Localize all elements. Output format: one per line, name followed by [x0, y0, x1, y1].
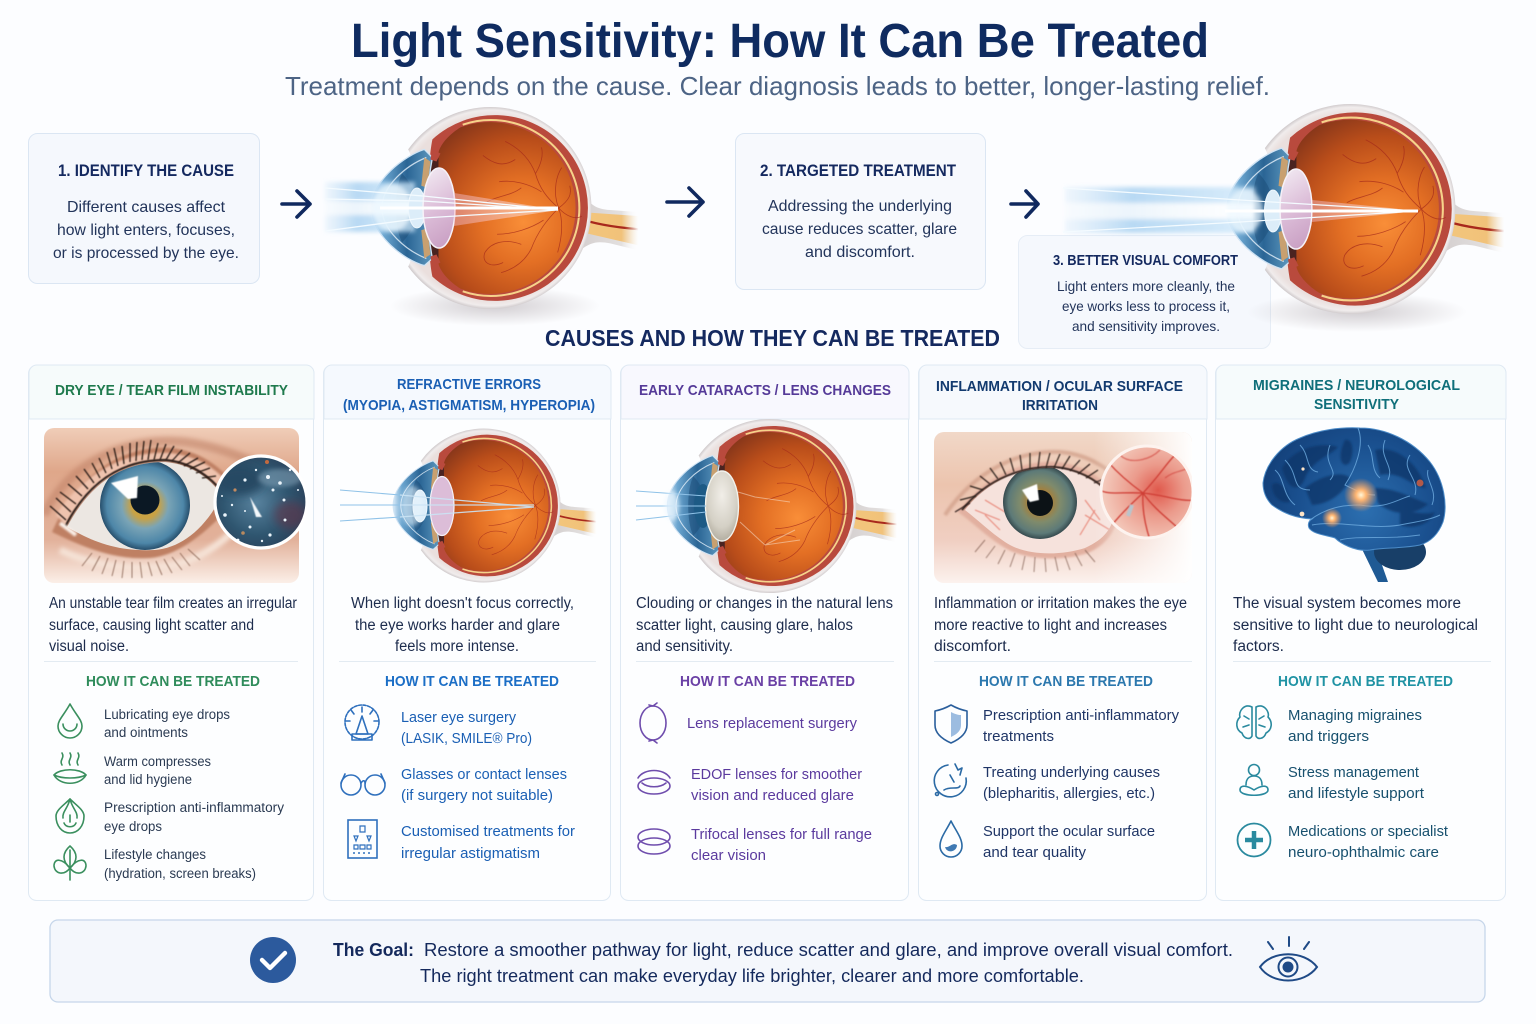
treatments heading: inflammation: HOW IT CAN BE TREATED: [979, 673, 1153, 690]
illustration: brain: [1263, 428, 1445, 582]
description: dry eye: [49, 595, 297, 655]
treatment: lens replacement: Lens replacement surgery: [687, 715, 857, 732]
treatment: underlying causes: Treating underlying causes: [983, 764, 1160, 781]
footer goal banner: [50, 920, 1485, 1002]
panel: inflammation: [918, 365, 1207, 900]
icon: underlying causes: [934, 764, 966, 797]
treatments heading: refractive errors: HOW IT CAN BE TREATED: [385, 673, 559, 690]
icon: meditation: [1240, 764, 1268, 795]
step 1 box: how light enters, focuses,: [57, 222, 235, 239]
treatment: glasses: [401, 766, 567, 804]
treatment: prescription: treatments: [983, 728, 1054, 745]
section heading: CAUSES AND HOW THEY CAN BE TREATED: [545, 325, 1000, 351]
treatment: underlying causes: [983, 764, 1160, 802]
treatment: prescription: [983, 707, 1179, 745]
treatment: warm compress: Warm compresses: [104, 754, 211, 769]
panel: early cataracts: [620, 365, 909, 900]
icon: trifocal lens: [638, 829, 670, 854]
step 1 box: [28, 134, 260, 284]
treatment: laser surgery: (LASIK, SMILE® Pro): [401, 730, 532, 747]
treatment: ocular surface: Support the ocular surface: [983, 823, 1155, 840]
description: dry eye: visual noise.: [49, 638, 129, 655]
heading: migraines: [1253, 377, 1460, 413]
treatment: eye drops: and ointments: [104, 725, 188, 740]
description: inflammation: [934, 595, 1187, 655]
goal text: Restore a smoother pathway for light, reduce scatter and glare, and improve overall visual comfort.: [424, 939, 1233, 960]
description: migraines: [1233, 595, 1478, 655]
description: refractive errors: [351, 595, 574, 655]
description: inflammation: Inflammation or irritation makes the eye: [934, 595, 1187, 612]
eye diagram: cataract: [636, 419, 897, 593]
icon: tear drop: [940, 821, 962, 857]
step 3 text: eye works less to process it,: [1062, 298, 1230, 314]
treatment: stress: and lifestyle support: [1288, 785, 1425, 802]
step 1 box: 1. IDENTIFY THE CAUSE: [58, 162, 234, 180]
treatment: customised: Customised treatments for: [401, 823, 575, 840]
heading: dry eye: DRY EYE / TEAR FILM INSTABILITY: [55, 382, 288, 399]
icon: laser: [345, 705, 379, 740]
treatment: anti-inflammatory drops: eye drops: [104, 819, 162, 834]
treatment: prescription: Prescription anti-inflammatory: [983, 707, 1179, 724]
goal text: The Goal:: [333, 939, 414, 960]
treatments heading: dry eye: HOW IT CAN BE TREATED: [86, 673, 260, 690]
description: early cataracts: scatter light, causing glare, halos: [636, 617, 853, 634]
icon: leaf: [54, 846, 86, 880]
treatment: eye drops: [104, 707, 230, 740]
icon: warm compress: [54, 753, 86, 783]
icon: eye chart: [348, 820, 377, 858]
panel: dry eye: [28, 365, 314, 900]
description: refractive errors: the eye works harder and glare: [355, 617, 560, 634]
heading: inflammation: INFLAMMATION / OCULAR SURFACE: [936, 378, 1183, 395]
treatment: migraines: Managing migraines: [1288, 707, 1422, 724]
treatments heading: early cataracts: HOW IT CAN BE TREATED: [680, 673, 855, 690]
arrow: eye to step 2: [667, 188, 703, 216]
step 3 text: and sensitivity improves.: [1072, 318, 1220, 334]
description: early cataracts: and sensitivity.: [636, 638, 733, 655]
treatment: anti-inflammatory drops: [104, 800, 284, 834]
step 3 box background: [1018, 236, 1270, 348]
goal text: [333, 939, 1233, 986]
eye diagram: scattered light: [325, 107, 638, 326]
photo: dry eye with tear film close-up: [44, 428, 307, 583]
treatment: trifocal: clear vision: [691, 847, 766, 864]
eye diagram: clean light: [1063, 104, 1504, 332]
description: inflammation: discomfort.: [934, 638, 1011, 655]
treatment: glasses: (if surgery not suitable): [401, 787, 553, 804]
treatment: customised: [401, 823, 575, 862]
panel: refractive errors: [324, 365, 611, 900]
treatment: lifestyle: Lifestyle changes: [104, 847, 206, 862]
treatment: EDOF: EDOF lenses for smoother: [691, 766, 862, 783]
treatment: anti-inflammatory drops: Prescription anti-inflammatory: [104, 800, 284, 815]
step 2 box: 2. TARGETED TREATMENT: [760, 162, 956, 180]
description: migraines: sensitive to light due to neurological: [1233, 617, 1478, 634]
treatment: migraines: [1288, 707, 1422, 745]
icon: brain outline: [1237, 706, 1271, 738]
treatment: medications: [1288, 823, 1449, 861]
icon: glasses: [341, 774, 385, 795]
description: early cataracts: Clouding or changes in the natural lens: [636, 595, 893, 612]
step 3 text: Light enters more cleanly, the: [1057, 278, 1235, 294]
title: Light Sensitivity: How It Can Be Treated: [351, 15, 1209, 68]
heading: refractive errors: REFRACTIVE ERRORS: [397, 376, 541, 393]
icon: eye with rays: [1260, 937, 1317, 980]
heading: migraines: MIGRAINES / NEUROLOGICAL: [1253, 377, 1460, 394]
heading: refractive errors: (MYOPIA, ASTIGMATISM, HYPEROPIA): [343, 397, 595, 414]
subtitle: Treatment depends on the cause. Clear diagnosis leads to better, longer-lasting relief.: [285, 71, 1270, 101]
treatment: EDOF: [691, 766, 862, 804]
treatment: glasses: Glasses or contact lenses: [401, 766, 567, 783]
icon: anti-inflammatory drop: [56, 799, 84, 833]
description: refractive errors: When light doesn't focus correctly,: [351, 595, 574, 612]
heading: early cataracts: EARLY CATARACTS / LENS CHANGES: [639, 382, 891, 399]
step 1 box: Different causes affect: [67, 199, 226, 216]
panel: migraines: [1216, 365, 1506, 900]
description: dry eye: An unstable tear film creates an irregular: [49, 595, 297, 612]
description: migraines: The visual system becomes more: [1233, 595, 1461, 612]
treatment: warm compress: and lid hygiene: [104, 772, 192, 787]
description: dry eye: surface, causing light scatter and: [49, 617, 254, 634]
goal text: The right treatment can make everyday life brighter, clearer and more comfortable.: [420, 965, 1084, 986]
treatment: laser surgery: Laser eye surgery: [401, 709, 516, 726]
description: migraines: factors.: [1233, 638, 1284, 655]
step 3 text: 3. BETTER VISUAL COMFORT: [1053, 253, 1238, 269]
heading: inflammation: IRRITATION: [1022, 397, 1098, 414]
treatment: trifocal: Trifocal lenses for full range: [691, 826, 872, 843]
treatment: warm compress: [104, 754, 211, 787]
treatment: eye drops: Lubricating eye drops: [104, 707, 230, 722]
description: inflammation: more reactive to light and increases: [934, 617, 1167, 634]
description: early cataracts: [636, 595, 893, 655]
treatment: lifestyle: (hydration, screen breaks): [104, 866, 256, 881]
treatment: ocular surface: [983, 823, 1155, 861]
heading: inflammation: [936, 378, 1183, 414]
heading: refractive errors: [343, 376, 595, 414]
treatment: medications: neuro-ophthalmic care: [1288, 844, 1439, 861]
step 2 box: [736, 134, 986, 290]
description: refractive errors: feels more intense.: [395, 638, 519, 655]
treatment: ocular surface: and tear quality: [983, 844, 1086, 861]
step 1 box: or is processed by the eye.: [53, 245, 239, 262]
eye diagram: refractive error: [340, 428, 596, 582]
treatment: customised: irregular astigmatism: [401, 845, 540, 862]
icon: medical plus: [1238, 824, 1270, 856]
arrow: step 1 to eye: [282, 191, 310, 217]
step 3 text: [1053, 253, 1238, 334]
treatment: lifestyle: [104, 847, 256, 881]
treatment: migraines: and triggers: [1288, 728, 1369, 745]
icon: droplet: [58, 704, 82, 738]
icon: check circle: [250, 937, 296, 983]
treatment: medications: Medications or specialist: [1288, 823, 1449, 840]
step 2 box: cause reduces scatter, glare: [762, 221, 957, 238]
treatments heading: migraines: HOW IT CAN BE TREATED: [1278, 673, 1453, 690]
icon: shield: [935, 705, 967, 743]
treatment: trifocal: [691, 826, 872, 864]
treatment: EDOF: vision and reduced glare: [691, 787, 854, 804]
icon: lens replacement: [640, 703, 666, 743]
heading: migraines: SENSITIVITY: [1314, 396, 1399, 413]
treatment: stress: Stress management: [1288, 764, 1420, 781]
treatment: underlying causes: (blepharitis, allergies, etc.): [983, 785, 1155, 802]
step 2 box: Addressing the underlying: [768, 198, 952, 215]
step 2 box: and discomfort.: [805, 244, 915, 261]
arrow: step 2 to eye: [1011, 191, 1038, 217]
treatment: laser surgery: [401, 709, 532, 747]
treatment: stress: [1288, 764, 1425, 802]
photo: irritated eye with close-up: [934, 432, 1195, 583]
icon: EDOF lens: [638, 770, 670, 794]
